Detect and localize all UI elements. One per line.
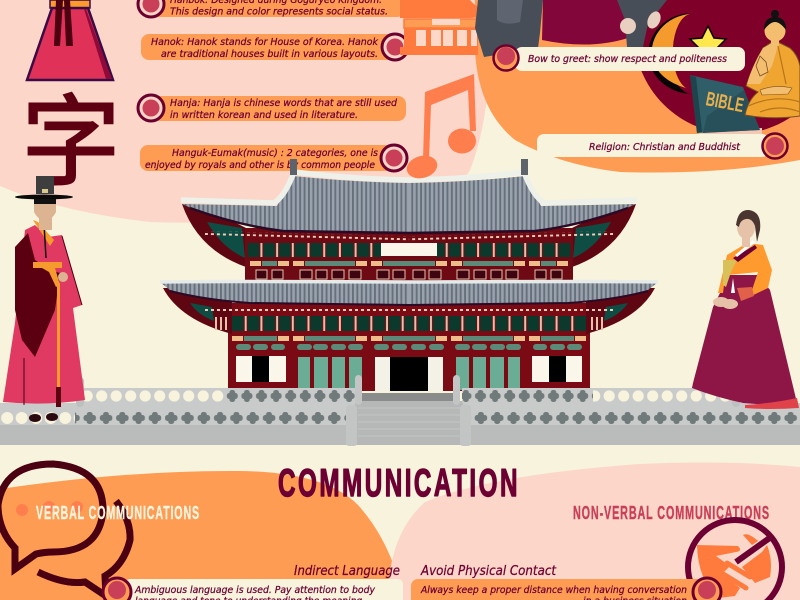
bottom blob: orange <box>0 471 400 600</box>
icon: bible <box>690 75 762 135</box>
background blob: upper right orange <box>475 0 800 172</box>
illustration: palace <box>0 159 800 446</box>
illustration: woman in hanbok <box>692 210 799 409</box>
icon: bowing people <box>475 0 667 57</box>
text block: avoid physical contact: Always keep a proper distance when having conversation <box>420 585 687 596</box>
illustration: man in hanbok <box>3 176 85 422</box>
label: religion <box>537 134 788 158</box>
icon: bible: BIBLE <box>704 88 746 117</box>
balustrade: right <box>453 375 800 446</box>
icon: no handshake <box>688 520 782 600</box>
bottom blob: pink <box>388 463 800 600</box>
label: Hanja: in written korean and used in literature. <box>170 110 358 121</box>
label: Hanja <box>138 95 406 121</box>
text block: indirect language: Indirect Language <box>294 564 400 579</box>
label: bow to greet: Bow to greet: show respect and politeness <box>528 54 727 65</box>
label: Hanok <box>141 34 408 60</box>
label: Hanok: Hanok: Hanok stands for House of Korea. Hanok <box>151 37 378 48</box>
label: Hanguk-Eumak <box>140 145 407 171</box>
label: Hanbok: This design and color represents social status. <box>170 6 388 18</box>
label: Hanguk-Eumak: enjoyed by royals and other is by common people <box>145 160 375 171</box>
icon: hanbok dress <box>27 0 113 80</box>
icon: hanja character: 字 <box>21 61 121 206</box>
label: Hanguk-Eumak: Hanguk-Eumak(music) : 2 categories, one is <box>172 148 378 159</box>
label: bow to greet <box>494 46 745 71</box>
icon: crescent moon <box>648 13 696 94</box>
title: COMMUNICATION <box>278 462 520 505</box>
label: Hanja: Hanja: Hanja is chinese words that are still used <box>170 98 398 109</box>
heading: verbal communications: VERBAL COMMUNICATIONS <box>36 502 200 523</box>
icon: star <box>690 26 726 58</box>
circle behind bowing people <box>542 0 628 45</box>
label: Hanok: are traditional houses built in various layouts. <box>161 49 378 60</box>
balustrade: left <box>0 375 362 446</box>
label: Hanbok <box>138 0 405 18</box>
icon: speech bubbles <box>0 464 130 596</box>
religion circle <box>634 0 800 134</box>
icon: orange pagoda <box>400 0 493 55</box>
text block: avoid physical contact: Avoid Physical Contact <box>420 564 557 579</box>
background blob: upper left pink <box>0 0 491 223</box>
icon: music note <box>404 74 476 182</box>
text block: indirect language <box>103 564 403 600</box>
text block: indirect language: Ambiguous language is used. Pay attention to body <box>134 585 375 596</box>
text block: avoid physical contact <box>411 564 721 600</box>
icon: buddha <box>745 10 800 118</box>
label: religion: Religion: Christian and Buddhist <box>589 142 741 153</box>
